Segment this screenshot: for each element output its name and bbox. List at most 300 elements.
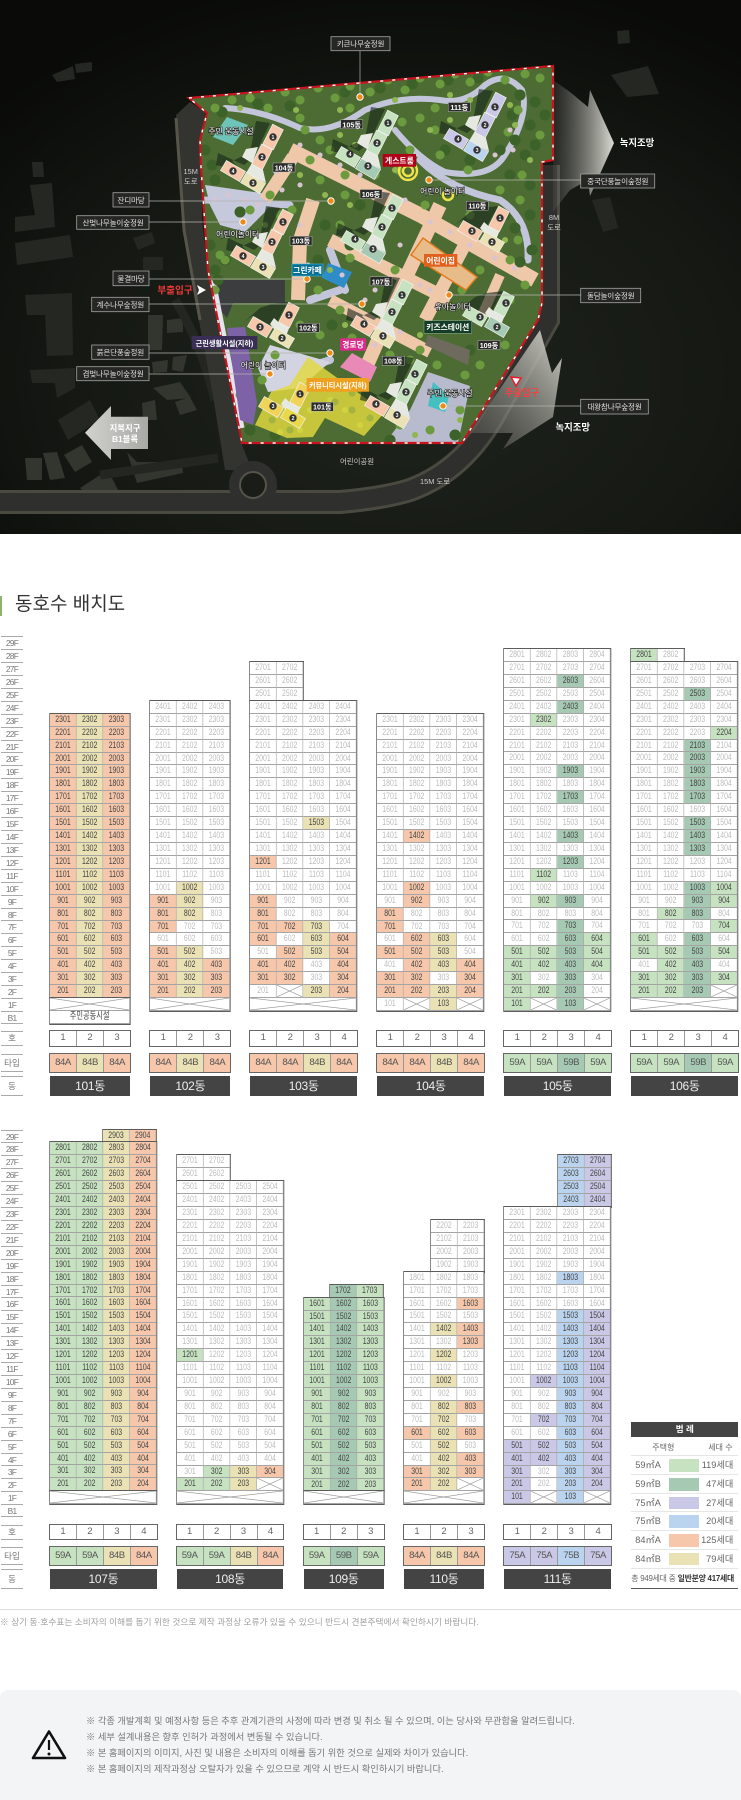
building 106 table: 1704 (717, 791, 732, 802)
building 108 table: 702 (211, 1414, 222, 1425)
building 106 table: 201 (639, 985, 650, 996)
floor labels lower: B1 (8, 1506, 16, 1516)
building 105 table: 1904 (590, 765, 605, 776)
building 111 table: 2404 (590, 1194, 605, 1205)
building 111 table: 1002 (536, 1375, 552, 1386)
arrow: green view south-east (470, 330, 562, 449)
floor labels upper: B1 (8, 1013, 16, 1023)
label: double cherry play garden: 겹벚나무놀이숲정원 (82, 369, 144, 379)
building 106 table: 2301 (637, 714, 652, 725)
building 105 table: 1504 (590, 817, 605, 828)
building 106: 1 (391, 206, 394, 212)
building 101 table: 1901 (55, 765, 71, 776)
underground parking entrance (425, 335, 470, 365)
building 108 table: 2304 (262, 1207, 277, 1218)
building 106 table: 1803 (690, 778, 705, 789)
building 101 table: 602 (84, 933, 95, 944)
building 104 table: 84B (436, 1057, 452, 1068)
building 108 table: 2404 (262, 1194, 277, 1205)
building 111 table: 802 (538, 1401, 550, 1412)
building 108 table: 2 (214, 1526, 219, 1536)
building 106 table: 1602 (663, 804, 679, 815)
building 102 table: 2301 (156, 714, 171, 725)
building 106 table: 802 (665, 908, 677, 919)
building 108 table: 1404 (262, 1323, 277, 1334)
building 103 table: 1403 (309, 830, 324, 841)
building 109 table: 303 (364, 1466, 376, 1477)
building 105 table: 904 (592, 895, 603, 906)
building 104 table: 604 (465, 933, 476, 944)
building 109 table: 1203 (362, 1349, 378, 1360)
building 107 table: 1403 (109, 1323, 124, 1334)
building 102 table: 203 (211, 985, 222, 996)
legend 84A: 125세대 (701, 1535, 733, 1545)
building 101 table: 84B (82, 1057, 98, 1068)
building 103 table: 203 (311, 985, 322, 996)
building 106 table: 301 (639, 972, 650, 983)
building 104 table: 84A (382, 1057, 398, 1068)
building 109 table: 202 (338, 1479, 349, 1490)
building 103 table: 1002 (282, 882, 298, 893)
legend 84A (631, 1530, 738, 1549)
building 107 table: 304 (137, 1465, 149, 1476)
label: lawn yard: 잔디마당 (117, 195, 145, 205)
building 103 table: 2304 (336, 714, 351, 725)
building 108 table: 1903 (235, 1259, 251, 1270)
building 101 table: 2203 (109, 727, 124, 738)
building 107 table: 2501 (55, 1181, 71, 1192)
legend 75B: 75㎡B (635, 1516, 661, 1526)
building 102 table: 1602 (182, 804, 198, 815)
label: tall tree garden: 키큰나무숲정원 (337, 39, 384, 49)
building 110 table: 1301 (409, 1336, 425, 1347)
building 106 table: 704 (719, 920, 730, 931)
building 105 table: 2204 (590, 727, 605, 738)
building 103 table: 1704 (336, 791, 351, 802)
building 105 table: 504 (592, 946, 603, 957)
building 106 table: 1104 (717, 869, 732, 880)
floor labels upper: 26F (6, 677, 18, 687)
building 111 table: 404 (592, 1453, 603, 1464)
building 108 table: 201 (184, 1478, 195, 1489)
floor labels upper: 28F (6, 651, 18, 661)
building 103 table: 4 (341, 1032, 347, 1043)
building 107 table: 1202 (82, 1349, 97, 1360)
building 111 table: 504 (592, 1440, 603, 1451)
building 101 table: 1702 (82, 791, 97, 802)
building 105 table: 401 (512, 959, 523, 970)
building 104 table: 803 (438, 908, 449, 919)
building 108 table: 2702 (209, 1155, 224, 1166)
notice line 4: ※ 본 홈페이지의 제작과정상 오탈자가 있을 수 있으므로 계약 시 반드시 확인하시기 바랍니다. (86, 1764, 444, 1774)
building 101 table: 1101 (56, 869, 70, 880)
building 107 table: 2402 (82, 1194, 97, 1205)
road labels: 8M (549, 213, 559, 222)
building 111 table: 401 (512, 1453, 523, 1464)
legend header: 범 례 (676, 1424, 694, 1434)
building 108 table: 1203 (235, 1349, 251, 1360)
building 101 table: 1703 (109, 791, 124, 802)
building 101 (258, 382, 310, 428)
building 108 table: 1502 (209, 1310, 224, 1321)
building 107 table: 2804 (135, 1142, 151, 1153)
building 105 table: 2201 (510, 727, 525, 738)
building 110 table: 1501 (409, 1310, 425, 1321)
building 106 table: 2502 (663, 688, 679, 699)
building 108 table: 2001 (182, 1246, 197, 1257)
building 106 table: 2504 (717, 688, 732, 699)
site boundary (189, 66, 553, 443)
building 110 table: 1303 (463, 1336, 478, 1347)
building 111 table: 1404 (590, 1323, 605, 1334)
building 103 table: 2004 (336, 753, 351, 764)
legend 59A (631, 1455, 738, 1474)
building 109 table: 1102 (336, 1362, 351, 1373)
building 108 table: 108동 (215, 1572, 245, 1586)
building 105 table: 2301 (510, 714, 525, 725)
building 102 table: 1401 (156, 830, 171, 841)
building 103 table: 1601 (256, 804, 271, 815)
facility labels: 키즈스테이션 (426, 322, 469, 332)
building 107 table: 801 (57, 1401, 69, 1412)
building 107 table: 701 (57, 1414, 69, 1425)
building 109 table: 203 (364, 1479, 376, 1490)
building 111 table: 1603 (563, 1298, 578, 1309)
building 106 table: 304 (719, 972, 730, 983)
building 108 table: 1901 (182, 1259, 197, 1270)
building 111 table: 1102 (537, 1362, 551, 1373)
building 106 table: 2102 (663, 740, 679, 751)
building 107 table: 2403 (109, 1194, 124, 1205)
building 103 table: 2403 (309, 701, 324, 712)
building 108 table: 2301 (182, 1207, 197, 1218)
building 104 table: 2 (415, 1032, 420, 1043)
building 105 table: 2103 (563, 740, 578, 751)
building 110 table: 202 (438, 1478, 449, 1489)
building 104 table: 1903 (436, 765, 451, 776)
building 106 table: 804 (719, 908, 730, 919)
building 102 table: 84A (210, 1057, 225, 1068)
building 106 table: 1201 (637, 856, 652, 867)
building 105 table: 604 (592, 933, 603, 944)
building 105 table: 1701 (510, 791, 525, 802)
building 103 table: 603 (311, 933, 322, 944)
floor labels upper: 22F (6, 729, 18, 739)
building 105 table: 804 (592, 908, 603, 919)
building 108 table: 2501 (182, 1181, 197, 1192)
building 108 table: 904 (264, 1388, 276, 1399)
building 104 table: 1502 (409, 817, 425, 828)
floor labels upper: 24F (6, 703, 18, 713)
building 108 table: 2004 (262, 1246, 277, 1257)
building 106 table: 1501 (637, 817, 652, 828)
building 106 table: 803 (692, 908, 703, 919)
building 103 table: 504 (338, 946, 349, 957)
building 107 table: 2103 (109, 1233, 124, 1244)
building 101 table: 84A (109, 1057, 125, 1068)
building 108 table: 4 (268, 1526, 273, 1536)
building number tags: 103동 (292, 237, 311, 246)
building 108 table: 1204 (262, 1349, 277, 1360)
building 107 table: 704 (137, 1414, 149, 1425)
building 108 table: 2503 (235, 1181, 251, 1192)
building 111 table: 1501 (510, 1310, 525, 1321)
facility labels: 커뮤니티시설(지하) (309, 381, 367, 390)
building 105 table: 1501 (510, 817, 525, 828)
building 109: 3 (479, 315, 482, 321)
building 103 table: 2402 (282, 701, 298, 712)
floor labels lower: 9F (8, 1390, 16, 1400)
building 106 table: 2604 (717, 675, 732, 686)
floor labels upper: 동 (8, 1081, 16, 1091)
building 104 table: 1704 (463, 791, 478, 802)
outdoor place labels (208, 126, 473, 398)
floor labels lower: 24F (6, 1196, 18, 1206)
building 101 table: 1 (60, 1032, 66, 1043)
building 110 table: 803 (465, 1401, 476, 1412)
building 106 table: 59A (663, 1057, 679, 1068)
legend 75A: 27세대 (706, 1498, 733, 1508)
building 104 table: 603 (438, 933, 449, 944)
building 104 table: 501 (385, 946, 396, 957)
building 101 table: 2202 (82, 727, 97, 738)
building 105 table: 201 (512, 985, 523, 996)
building 108 table: 84B (236, 1550, 251, 1561)
building 103 table: 1303 (309, 843, 324, 854)
building 111 table: 1004 (590, 1375, 605, 1386)
building 111 table: 75A (509, 1550, 525, 1561)
building 110 table: 901 (411, 1388, 423, 1399)
notice line 3: ※ 본 홈페이지의 이미지, 사진 및 내용은 소비자의 이해를 돕기 위한 것으로 실제와 차이가 있습니다. (86, 1748, 468, 1758)
building 101 table: 501 (57, 946, 69, 957)
building 105 table: 2501 (510, 688, 525, 699)
building 108: 4 (375, 402, 378, 408)
outdoor place labels: 어린이놀이터 (216, 229, 259, 239)
building 111 table: 901 (512, 1388, 523, 1399)
building 103 table: 1202 (282, 856, 298, 867)
building number tags: 107동 (372, 277, 391, 286)
building 108 table: 59A (209, 1550, 224, 1561)
building 109 table: 59A (309, 1550, 325, 1561)
building 107 table: 84B (109, 1550, 125, 1561)
building 103 table: 2502 (282, 688, 298, 699)
building 108 table: 701 (184, 1414, 195, 1425)
building 105 table: 2102 (536, 740, 552, 751)
building 106 table: 1601 (637, 804, 652, 815)
building 101 table: 1601 (55, 804, 71, 815)
building 110 table: 2103 (463, 1233, 478, 1244)
building 111 table: 604 (592, 1427, 603, 1438)
building 110 table: 1803 (463, 1272, 478, 1283)
building 104 table: 1801 (383, 778, 398, 789)
building 105 table: 1102 (537, 869, 551, 880)
building 107 table: 2203 (109, 1220, 124, 1231)
building 104 table: 1701 (383, 791, 398, 802)
building 111 table: 2104 (590, 1233, 605, 1244)
building 108 table: 601 (184, 1427, 195, 1438)
building 108 table: 901 (184, 1388, 195, 1399)
building 104 table: 1804 (463, 778, 478, 789)
building 106 table: 203 (692, 985, 703, 996)
building 106 table: 2601 (637, 675, 652, 686)
building 105 table: 2104 (590, 740, 605, 751)
building 109 table: 601 (311, 1427, 322, 1438)
floor labels upper: 3F (8, 974, 16, 984)
building 106 table: 2101 (637, 740, 652, 751)
building 102 table: 2003 (209, 753, 224, 764)
building 106 table: 1101 (637, 869, 652, 880)
building 105 table: 2603 (563, 675, 578, 686)
building 106 table: 1302 (663, 843, 679, 854)
building 107: 1 (401, 293, 404, 299)
building 102 table: 2103 (209, 740, 224, 751)
building 105 table: 503 (565, 946, 576, 957)
building 106 table: 701 (639, 920, 650, 931)
building 106 table: 801 (639, 908, 650, 919)
building 104 table: 1303 (436, 843, 451, 854)
building 104 table: 1803 (436, 778, 451, 789)
building 101 table: 1402 (82, 830, 97, 841)
building 107 table: 4 (141, 1526, 146, 1536)
building 111 table: 904 (592, 1388, 603, 1399)
building 111 table: 1003 (563, 1375, 578, 1386)
building 105 table: 602 (538, 933, 550, 944)
building 106 table: 1503 (690, 817, 705, 828)
building 105 table: 2 (542, 1032, 547, 1043)
building 111 table: 501 (512, 1440, 523, 1451)
building 105 table: 2402 (536, 701, 552, 712)
building 103 table: 1104 (336, 869, 351, 880)
building 107 table: 2101 (55, 1233, 71, 1244)
building 107 table: 2204 (135, 1220, 151, 1231)
building 103 table: 2302 (282, 714, 298, 725)
floor labels upper: 2F (8, 987, 16, 997)
building 106 table: 603 (692, 933, 703, 944)
building 107 table: 201 (57, 1478, 69, 1489)
facility labels: 근린생활시설(지하) (196, 339, 254, 348)
building 103 table: 901 (258, 895, 269, 906)
floor labels upper: 11F (6, 871, 18, 881)
building 110 table: 302 (438, 1466, 449, 1477)
building 103 table: 1804 (336, 778, 351, 789)
label: lawn yard (113, 193, 149, 207)
floor labels upper: 23F (6, 716, 18, 726)
building 106 table: 1102 (664, 869, 678, 880)
building 106 table: 1301 (637, 843, 652, 854)
building 103 table: 2702 (282, 662, 298, 673)
building 108 table: 1002 (209, 1375, 224, 1386)
building 107 table: 59A (82, 1550, 98, 1561)
building 109 table: 1302 (336, 1336, 351, 1347)
building 105 table: 1203 (563, 856, 578, 867)
building 108 table: 1301 (182, 1336, 197, 1347)
building 105 table: 1601 (510, 804, 525, 815)
building 111 table: 2103 (563, 1233, 578, 1244)
building 104 table: 2303 (436, 714, 451, 725)
building 106 table: 202 (665, 985, 677, 996)
building 107 table: 503 (111, 1440, 122, 1451)
building 111 table: 502 (538, 1440, 550, 1451)
building 104 table: 1503 (436, 817, 451, 828)
building 110 table: 1002 (436, 1375, 451, 1386)
floor labels lower: 16F (6, 1299, 18, 1309)
building 102 table: 403 (211, 959, 222, 970)
building 108 table: 59A (182, 1550, 198, 1561)
building 106 table: 2001 (637, 752, 652, 763)
label: katsura garden: 계수나무숲정원 (97, 300, 144, 310)
building 111 table: 1902 (536, 1259, 552, 1270)
building 103 table: 2401 (256, 701, 271, 712)
building 103 table: 103동 (289, 1079, 319, 1093)
floor labels upper: 16F (6, 806, 18, 816)
building 108 table: 3 (241, 1526, 246, 1536)
legend column heads: 주택형 (652, 1443, 674, 1452)
neighbourhood facility building (227, 327, 257, 425)
building 105 table: 1903 (563, 765, 578, 776)
floor labels lower: 26F (6, 1170, 18, 1180)
building 102 table: 401 (158, 959, 169, 970)
building 108 table: 1303 (235, 1336, 251, 1347)
floor labels lower: 7F (8, 1416, 16, 1426)
building 110 table: 503 (465, 1440, 476, 1451)
building 107 table: 703 (111, 1414, 122, 1425)
building 106 table: 1 (642, 1032, 647, 1043)
building 108 table: 2401 (182, 1194, 197, 1205)
building 103 table: 2303 (309, 714, 324, 725)
building 108 table: 1604 (262, 1298, 277, 1309)
building 108 table: 2302 (209, 1207, 224, 1218)
building 105 table: 1901 (510, 765, 525, 776)
building 106 table: 504 (719, 946, 730, 957)
building 104 table: 2204 (463, 727, 478, 738)
building 105 table: 902 (538, 895, 550, 906)
building 106 table: 1002 (663, 882, 679, 893)
building 103 table: 1702 (282, 791, 298, 802)
building 109 table: 1101 (309, 1362, 324, 1373)
building 102 table: 1003 (209, 882, 224, 893)
building 105 table: 603 (565, 933, 576, 944)
building 103 table: 601 (258, 933, 269, 944)
building 108: 3 (396, 413, 399, 419)
facility labels: 게스트룸 (385, 155, 414, 165)
building 101 table: 203 (111, 985, 122, 996)
building 107 table: 1004 (135, 1375, 151, 1386)
building 107 table: 2002 (82, 1246, 97, 1257)
building 103 table: 1604 (336, 804, 351, 815)
building 102 table: 1 (161, 1032, 166, 1043)
building 108 table: 703 (237, 1414, 249, 1425)
floor labels upper: 1F (8, 1000, 16, 1010)
building 105 (331, 107, 398, 180)
building 109 table: 703 (364, 1414, 376, 1425)
building 101 table: 201 (57, 985, 69, 996)
building 111 table: 1903 (563, 1259, 578, 1270)
building 105 table: 301 (512, 972, 523, 983)
building 104 table: 1102 (410, 869, 424, 880)
outdoor place labels: 유아놀이터 (435, 302, 471, 312)
building 107 table: 2102 (82, 1233, 97, 1244)
building 104 table: 2203 (436, 727, 451, 738)
heading: 동호수 배치도 (15, 594, 125, 615)
building 101 table: 1203 (109, 856, 124, 867)
building 107 table: 1001 (55, 1375, 71, 1386)
building 108 table: 1402 (209, 1323, 224, 1334)
building 108 table: 1802 (209, 1272, 224, 1283)
building 105 table: 2703 (563, 662, 578, 673)
building 105 table: 2302 (536, 714, 552, 725)
building 102 table: 3 (215, 1032, 220, 1043)
building 108 table: 802 (211, 1401, 222, 1412)
